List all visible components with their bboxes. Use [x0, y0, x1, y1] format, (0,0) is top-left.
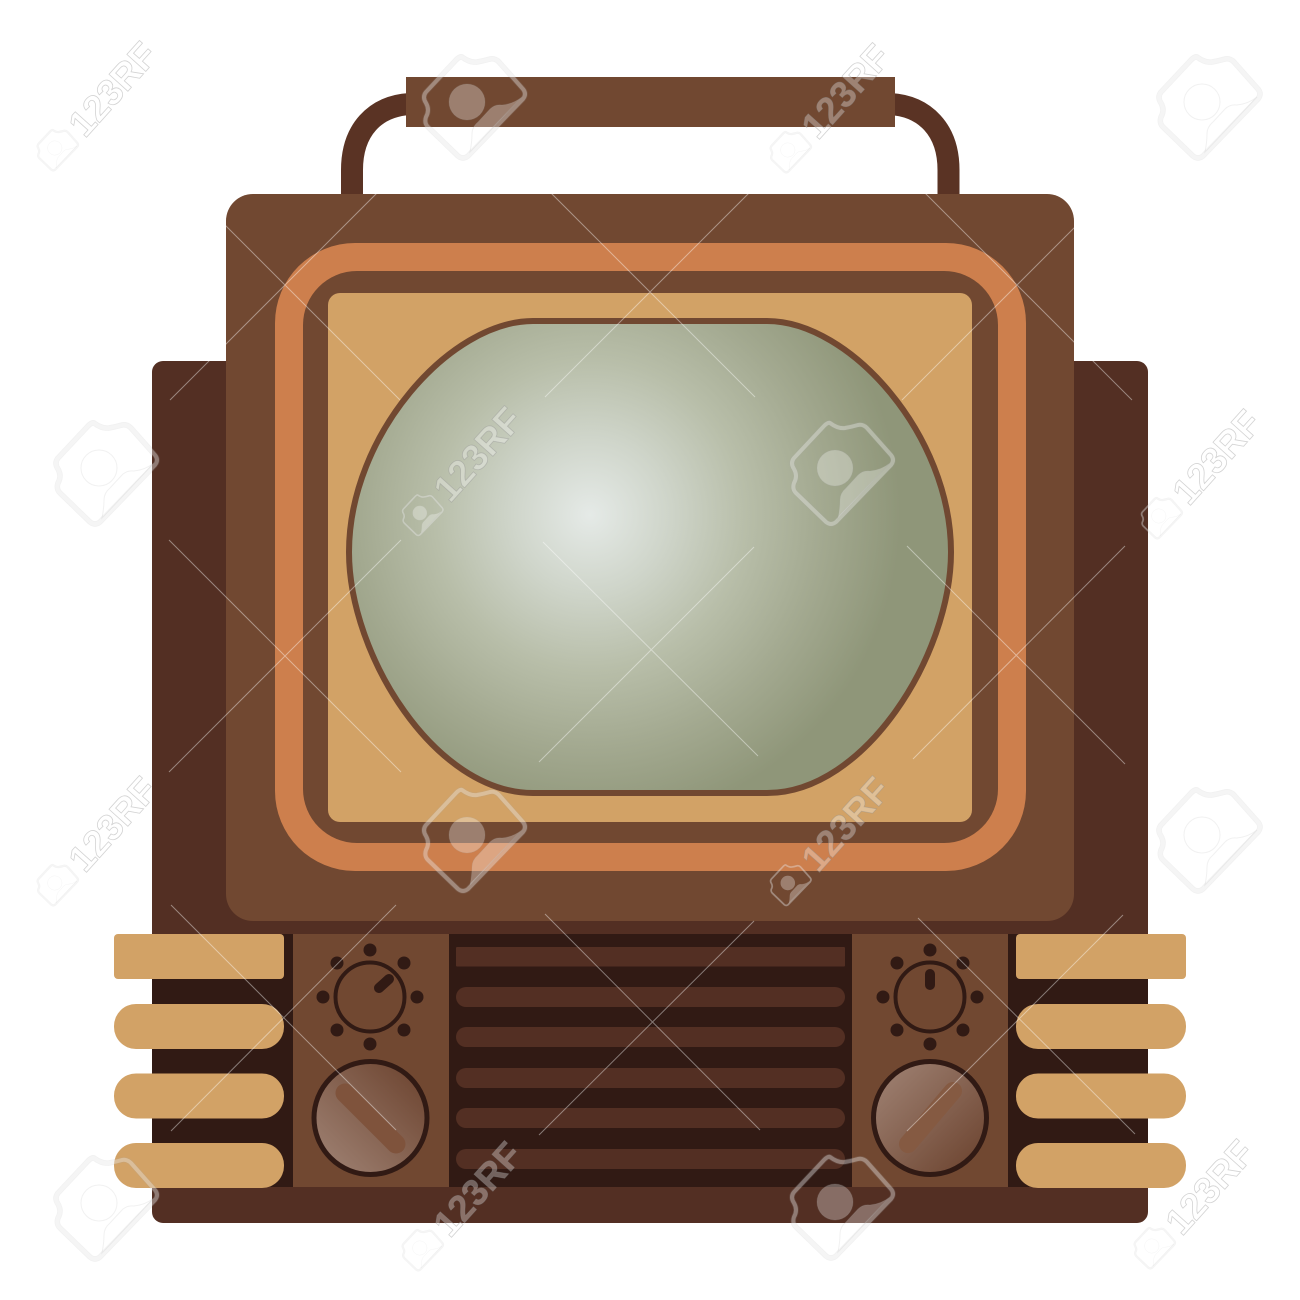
- watermark logos with text: 123RF: [60, 769, 165, 879]
- control band: [152, 934, 1148, 1187]
- watermark logos with text: 123RF: [1157, 1132, 1262, 1242]
- watermark logos with text: 123RF: [1164, 402, 1269, 512]
- watermark logos with text: 123RF: [425, 399, 530, 509]
- right large knob: [874, 1062, 986, 1174]
- left small dial: [316, 944, 424, 1050]
- CRT screen: [349, 321, 951, 793]
- watermark logos with text: 123RF: [425, 1134, 530, 1244]
- front housing: [226, 194, 1074, 921]
- watermark logos with text: 123RF: [793, 36, 898, 146]
- left large knob: [314, 1062, 427, 1174]
- left side slats: [114, 934, 284, 1188]
- rear cabinet: [152, 361, 1148, 1223]
- speaker grille: [456, 947, 845, 1169]
- watermark logos with text: 123RF: [793, 769, 898, 879]
- screen frame: [275, 243, 1026, 871]
- watermark logos with text: 123RF: [60, 34, 165, 144]
- right small dial: [876, 944, 984, 1050]
- right side slats: [1016, 934, 1186, 1188]
- watermark cross lines: [169, 170, 1135, 1135]
- carrying handle: [352, 77, 948, 195]
